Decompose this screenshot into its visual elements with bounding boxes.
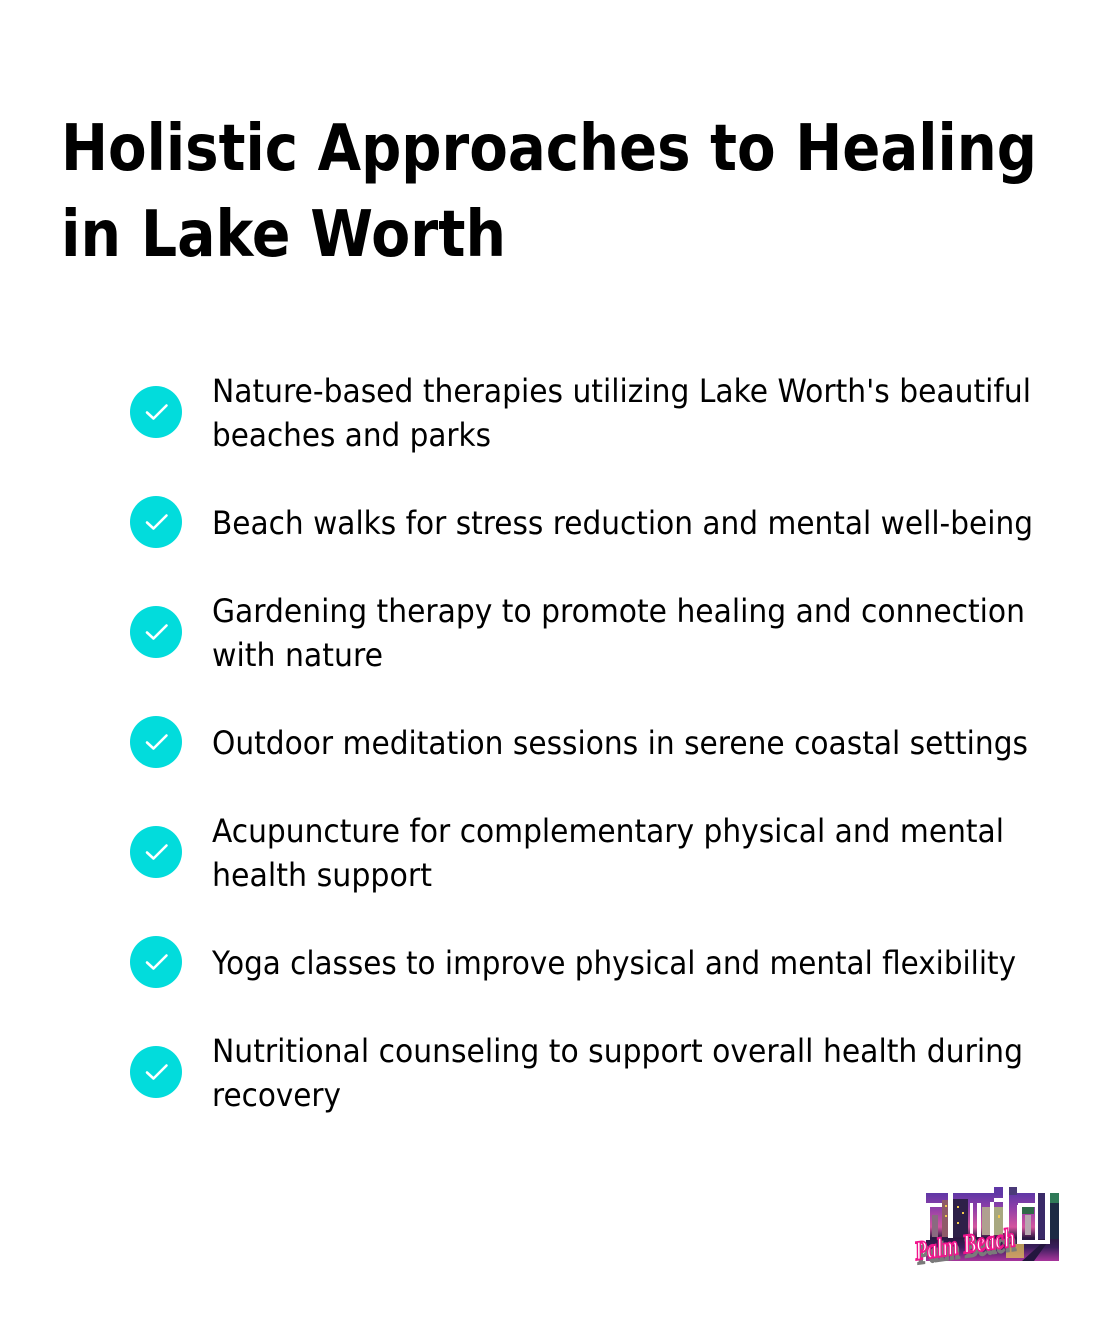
item: outdoor meditation [130, 716, 1028, 768]
checklist [130, 372, 1033, 1114]
item: acupuncture [130, 812, 1004, 894]
logo: Palm Beach [914, 1226, 1018, 1270]
item: outdoor meditation: Outdoor meditation sessions in serene coastal settings [212, 724, 1028, 762]
item: nutritional counseling [130, 1032, 1023, 1114]
item: gardening therapy: Gardening therapy to promote healing and connection [212, 592, 1025, 630]
title [61, 112, 1037, 272]
item: gardening therapy [130, 592, 1025, 674]
title: in Lake Worth [61, 198, 506, 272]
item: nature-based therapies: beaches and parks [212, 416, 491, 454]
item: beach walks: Beach walks for stress reduction and mental well-being [212, 504, 1033, 542]
item: beach walks [130, 496, 1033, 548]
logo [912, 1187, 1059, 1270]
item: gardening therapy: with nature [212, 636, 383, 674]
item: nutritional counseling: recovery [212, 1076, 341, 1114]
item: yoga classes: Yoga classes to improve physical and mental flexibility [211, 944, 1016, 982]
item: acupuncture: Acupuncture for complementary physical and mental [212, 812, 1004, 850]
item: yoga classes [130, 936, 1016, 988]
item: nature-based therapies [130, 372, 1031, 454]
item: nature-based therapies: Nature-based therapies utilizing Lake Worth's beautiful [212, 372, 1031, 410]
logo: Palm Beach [912, 1222, 1017, 1266]
item: nutritional counseling: Nutritional counseling to support overall health during [212, 1032, 1023, 1070]
item: acupuncture: health support [212, 856, 432, 894]
